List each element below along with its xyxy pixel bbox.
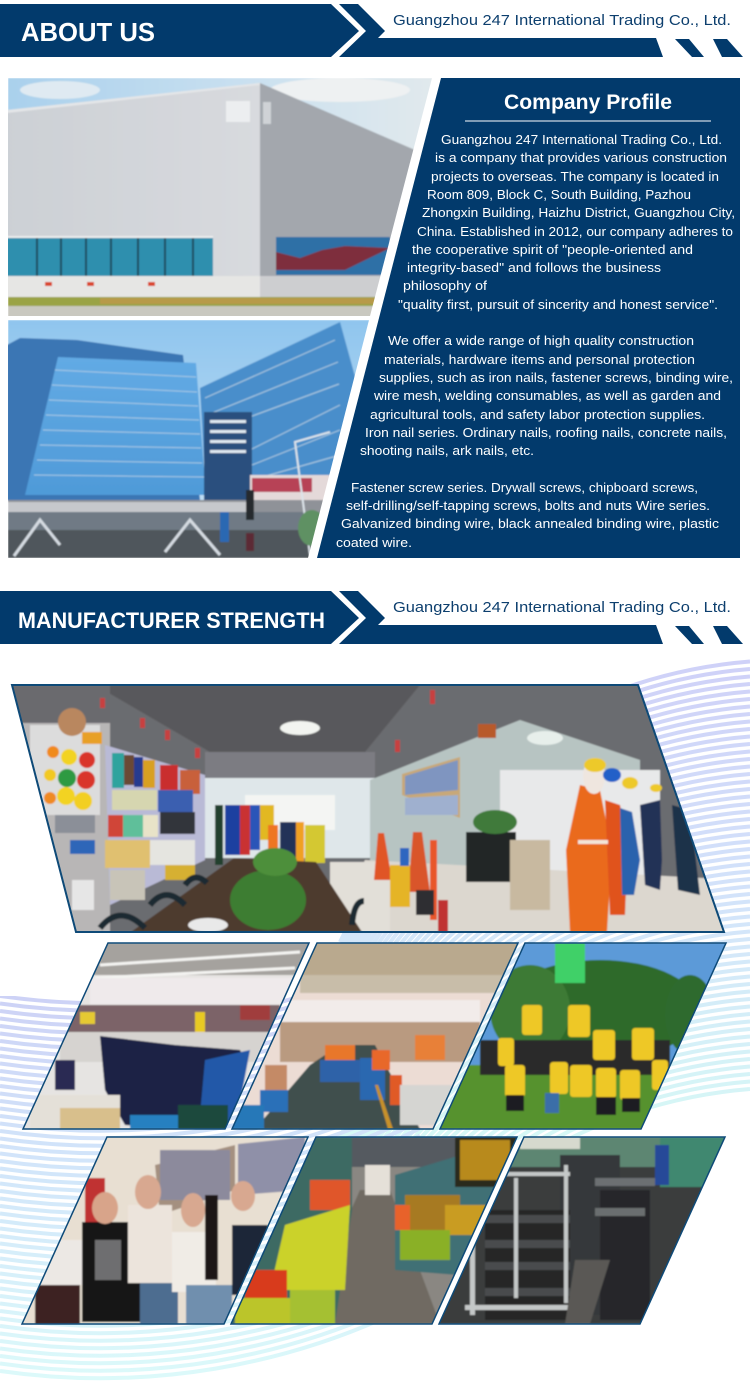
heading: manufacturer strength: MANUFACTURER STRENGTH [18,608,325,633]
body text: "quality first, pursuit of sincerity and honest service". [398,297,718,312]
body text: agricultural tools, and safety labor protection supplies. [370,407,705,422]
header: manufacturer strength [0,591,743,644]
left shelves [230,1137,352,1324]
body text: projects to overseas. The company is located in [431,169,719,184]
ceiling and wall tones [95,685,420,752]
banner: small slant blocks [675,626,704,644]
office [466,832,516,882]
photo: warehouse building [7,78,440,318]
body text: materials, hardware items and personal protection [384,352,695,367]
body text: supplies, such as iron nails, fastener screws, binding wire, [379,370,733,385]
body text: Room 809, Block C, South Building, Pazhou [427,187,691,202]
company name: Guangzhou 247 International Trading Co., Ltd. [393,12,731,29]
company name: Guangzhou 247 International Trading Co., Ltd. [393,599,731,616]
table and plants [131,858,362,932]
person: woman in navy [232,1225,268,1295]
person: man in black [82,1222,140,1322]
photos row 2 [23,943,730,1129]
photo: metal blocks in factory [439,1137,729,1324]
heading: company profile: Company Profile [504,91,672,114]
helmets [47,746,59,758]
body text [336,132,735,550]
banner: title band [0,591,359,644]
posters [402,757,460,818]
person: woman [172,1232,216,1292]
body text: Galvanized binding wire, black annealed binding wire, plastic [341,516,719,531]
body text: Zhongxin Building, Haizhu District, Guangzhou City, [422,205,735,220]
header: about us [0,4,743,57]
gloves and goods [112,753,124,788]
photo borders [23,943,726,1129]
body text: Fastener screw series. Drywall screws, chipboard screws, [351,480,698,495]
heading: about us: ABOUT US [21,17,155,47]
body text: Guangzhou 247 International Trading Co., Ltd. [441,132,722,147]
body text: Iron nail series. Ordinary nails, roofing nails, concrete nails, [365,425,727,440]
person: man in white [128,1205,172,1283]
body text: We offer a wide range of high quality construction [388,333,694,348]
photos row 3 [22,1137,729,1324]
cones [374,833,392,880]
clothes rack [215,805,223,865]
body text: self-drilling/self-tapping screws, bolts and nuts Wire series. [346,498,710,513]
banner: chevron and bar [339,4,663,57]
photo: team in vests [440,943,730,1129]
panel background [317,78,740,558]
banner: small slant block right [713,626,743,644]
photo: sewing workshop [23,943,313,1129]
body text: the cooperative spirit of "people-oriented and [412,242,693,257]
mannequins [566,785,612,932]
photo: office towers [7,320,380,558]
background stripes: upper right band [338,660,750,1140]
body text: wire mesh, welding consumables, as well as garden and [373,388,721,403]
flags [100,690,435,758]
banner: title band [0,4,359,57]
photo: showroom [0,685,750,932]
banner: chevron and bar [339,591,663,644]
banner: small slant blocks [675,39,704,57]
right shelves [394,1157,494,1276]
body text: is a company that provides various construction [435,150,727,165]
body text: shooting nails, ark nails, etc. [360,443,534,458]
photo: production floor [232,943,522,1129]
photo: warehouse aisle [230,1137,521,1324]
body text: China. Established in 2012, our company adheres to [417,224,733,239]
body text: integrity-based" and follows the business [407,260,661,275]
body text: philosophy of [403,278,487,293]
body text: coated wire. [336,535,412,550]
banner: small slant block right [713,39,743,57]
photo borders [22,1137,725,1324]
panel: company profile [317,78,740,558]
photo: team with customers [22,1137,312,1324]
background stripes: lower left band [0,996,420,1380]
photo border [12,685,724,932]
